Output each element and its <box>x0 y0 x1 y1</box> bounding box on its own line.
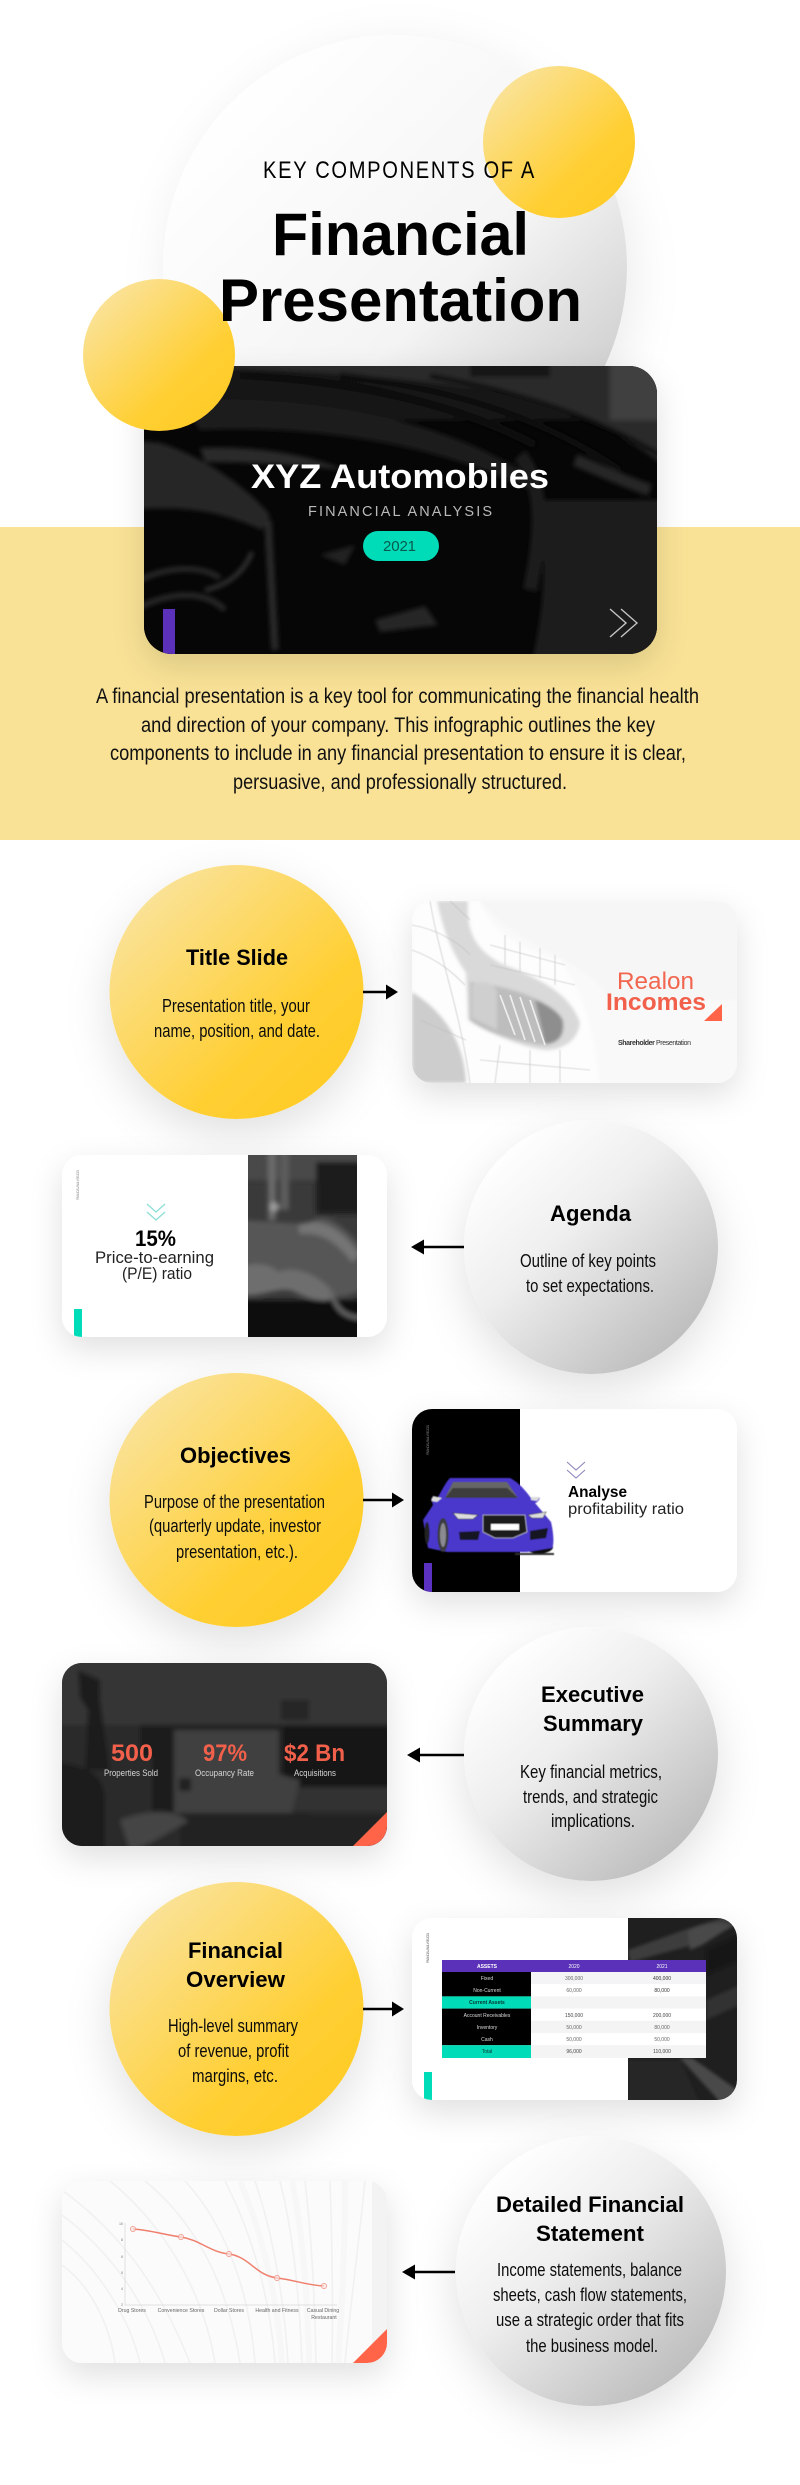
description: executive summary: Key financial metrics, <box>520 1762 662 1782</box>
panel: agenda <box>62 1120 718 1374</box>
description: objectives: Purpose of the presentation <box>144 1492 325 1512</box>
description: financial overview: of revenue, profit <box>178 2041 289 2061</box>
decorative yellow circle left <box>83 279 235 431</box>
circle: executive summary <box>464 1627 718 1881</box>
heading: financial overview <box>186 1938 286 1992</box>
circle: agenda <box>464 1120 718 1374</box>
table: 400,000 <box>653 1976 671 1982</box>
heading: agenda: Agenda <box>550 1201 632 1226</box>
purple accent bar <box>163 609 175 654</box>
coral corner triangle <box>353 1812 387 1846</box>
description: title slide: name, position, and date. <box>154 1021 320 1041</box>
stat value: 15% <box>135 1226 176 1251</box>
circle: objectives <box>110 1373 364 1627</box>
stat: properties sold: Properties Sold <box>104 1768 158 1779</box>
chart: 10 <box>119 2222 123 2226</box>
description: detailed financial statement <box>493 2260 687 2356</box>
chart: Dollar Stores <box>214 2308 244 2314</box>
description: executive summary: trends, and strategic <box>523 1787 658 1807</box>
description: financial overview: margins, etc. <box>192 2066 278 2086</box>
slide: key metrics <box>50 1655 400 1855</box>
heading: detailed financial statement: Statement <box>536 2221 645 2246</box>
table: Current Assets <box>469 2000 505 2006</box>
chart: Convenience Stores <box>158 2308 205 2314</box>
purple accent bar <box>424 1563 432 1592</box>
description: detailed financial statement: Income statements, balance <box>497 2260 682 2280</box>
vertical tiny label: FINANCIAL ANALYSIS 2021 <box>426 1933 430 1963</box>
stat label: (P/E) ratio <box>122 1264 192 1283</box>
hero slide: XYZ Automobiles <box>130 350 670 670</box>
heading: executive summary <box>541 1682 644 1736</box>
intro paragraph: and direction of your company. This infographic outlines the key <box>141 714 655 737</box>
table: Account Receivables <box>464 2013 511 2019</box>
main title: Presentation <box>219 267 582 334</box>
table: 300,000 <box>565 1976 583 1982</box>
decorative yellow circle top right <box>483 66 635 218</box>
aerial photo <box>628 1918 740 2104</box>
slide subtitle: Shareholder Presentation <box>618 1040 691 1047</box>
chevrons teal <box>147 1204 165 1220</box>
panel: financial overview <box>110 1882 740 2136</box>
chart: Health and Fitness <box>255 2308 299 2314</box>
table: 2020 <box>568 1964 580 1970</box>
chart <box>118 2222 339 2321</box>
chart: 4 <box>121 2287 123 2291</box>
main title <box>219 201 582 334</box>
description: agenda: Outline of key points <box>520 1251 656 1271</box>
panel: objectives <box>110 1373 737 1627</box>
table: 80,000 <box>654 2025 670 2031</box>
slide caption: profitability ratio <box>568 1501 684 1518</box>
panel: detailed financial statement <box>62 2136 726 2406</box>
heading: financial overview: Overview <box>186 1967 286 1992</box>
table: 50,000 <box>654 2037 670 2043</box>
year pill: 2021 <box>383 538 416 555</box>
stat: occupancy rate <box>195 1740 254 1779</box>
circle: title slide <box>110 865 364 1119</box>
heading: executive summary: Summary <box>543 1711 644 1736</box>
heading: objectives: Objectives <box>180 1443 291 1468</box>
arrow left <box>407 1748 464 1762</box>
slide caption <box>568 1484 684 1518</box>
hero subtitle: FINANCIAL ANALYSIS <box>308 504 492 520</box>
table: ASSETS <box>477 1964 498 1970</box>
circle: financial overview <box>110 1882 364 2136</box>
stat: occupancy rate: 97% <box>203 1740 247 1767</box>
description: executive summary: implications. <box>551 1811 635 1831</box>
table: 2021 <box>656 1964 668 1970</box>
eyebrow heading: KEY COMPONENTS OF A <box>263 157 536 184</box>
stat: acquisitions: Acquisitions <box>294 1768 336 1779</box>
table: 50,000 <box>566 2037 582 2043</box>
stat: occupancy rate: Occupancy Rate <box>195 1768 254 1779</box>
double chevron icon <box>610 609 637 637</box>
description: title slide: Presentation title, your <box>162 996 310 1016</box>
intro paragraph: A financial presentation is a key tool for communicating the financial health <box>96 685 699 708</box>
chart: 6 <box>121 2255 123 2259</box>
coral triangle <box>704 1004 722 1021</box>
arrow left <box>402 2264 455 2280</box>
arrow right <box>363 984 398 1000</box>
heading: financial overview: Financial <box>188 1938 283 1963</box>
chart: 5 <box>121 2271 123 2275</box>
table: Non-Current <box>473 1988 501 1994</box>
stat label: Price-to-earning <box>95 1248 214 1267</box>
table: Total <box>482 2049 492 2055</box>
slide: price to earning ratio <box>62 1150 387 1340</box>
hero title: XYZ Automobiles <box>251 458 549 496</box>
slide title: Realon <box>617 968 694 995</box>
table: 110,000 <box>653 2049 671 2055</box>
stat: properties sold: 500 <box>111 1740 153 1767</box>
table <box>442 1960 706 2058</box>
heading: executive summary: Executive <box>541 1682 644 1707</box>
table: Cash <box>481 2037 493 2043</box>
description: financial overview <box>168 2016 298 2086</box>
teal accent bar <box>74 1309 82 1337</box>
description: financial overview: High-level summary <box>168 2016 298 2036</box>
panel: title slide <box>110 865 737 1119</box>
chart: Restaurant <box>311 2315 337 2321</box>
year pill <box>363 531 439 561</box>
table: Inventory <box>477 2025 498 2031</box>
arrow left <box>411 1240 464 1254</box>
table: 60,000 <box>566 1988 582 1994</box>
intro paragraph: components to include in any financial presentation to ensure it is clear, <box>110 742 686 765</box>
slide: analyse profitability ratio <box>412 1409 737 1592</box>
heading: detailed financial statement: Detailed Financial <box>496 2192 684 2217</box>
stat: acquisitions: $2 Bn <box>284 1740 345 1767</box>
icon: purple car <box>423 1478 554 1555</box>
vertical tiny label: FINANCIAL ANALYSIS 2021 <box>426 1425 430 1455</box>
chart: 8 <box>121 2238 123 2242</box>
table: 200,000 <box>653 2013 671 2019</box>
description: agenda: to set expectations. <box>526 1276 654 1296</box>
yellow background band <box>0 527 800 840</box>
circle: detailed financial statement <box>456 2136 726 2406</box>
stat: properties sold <box>104 1740 158 1779</box>
table: Fixed <box>481 1976 493 1982</box>
description: objectives: (quarterly update, investor <box>149 1516 321 1536</box>
stat: acquisitions <box>284 1740 345 1779</box>
slide: line chart <box>62 2181 387 2363</box>
panel: executive summary <box>50 1627 718 1881</box>
heading: title slide: Title Slide <box>186 945 288 970</box>
slide: balance sheet table <box>412 1918 740 2104</box>
chevrons purple <box>567 1462 585 1478</box>
slide: Realon Incomes: Incomes <box>606 989 706 1016</box>
description: title slide <box>154 996 320 1041</box>
table: 50,000 <box>566 2025 582 2031</box>
heading: detailed financial statement <box>496 2192 684 2246</box>
slide: Realon Incomes <box>412 901 737 1083</box>
vertical tiny label: FINANCIAL ANALYSIS 2021 <box>76 1170 80 1200</box>
description: detailed financial statement: sheets, cash flow statements, <box>493 2285 687 2305</box>
description: objectives <box>144 1492 325 1562</box>
table: 80,000 <box>654 1988 670 1994</box>
chart: Casual Dining <box>307 2308 339 2314</box>
coral corner triangle <box>353 2329 387 2363</box>
main title: Financial <box>272 201 529 268</box>
description: objectives: presentation, etc.). <box>176 1542 298 1562</box>
slide caption: Analyse <box>568 1484 627 1501</box>
description: detailed financial statement: use a strategic order that fits <box>496 2310 684 2330</box>
table: 150,000 <box>565 2013 583 2019</box>
intro paragraph <box>96 685 699 794</box>
chart: Drug Stores <box>118 2308 146 2314</box>
chart: 2 <box>121 2303 123 2307</box>
intro paragraph: persuasive, and professionally structured. <box>233 771 567 794</box>
stat label <box>95 1248 214 1283</box>
teal accent bar <box>424 2072 432 2100</box>
table: 96,000 <box>566 2049 582 2055</box>
description: agenda <box>520 1251 656 1296</box>
large grey header circle <box>163 35 627 499</box>
arrow right <box>363 1492 404 1508</box>
arrow right <box>363 2002 404 2016</box>
description: executive summary <box>520 1762 662 1831</box>
description: detailed financial statement: the business model. <box>526 2336 658 2356</box>
handshake photo <box>248 1155 357 1337</box>
